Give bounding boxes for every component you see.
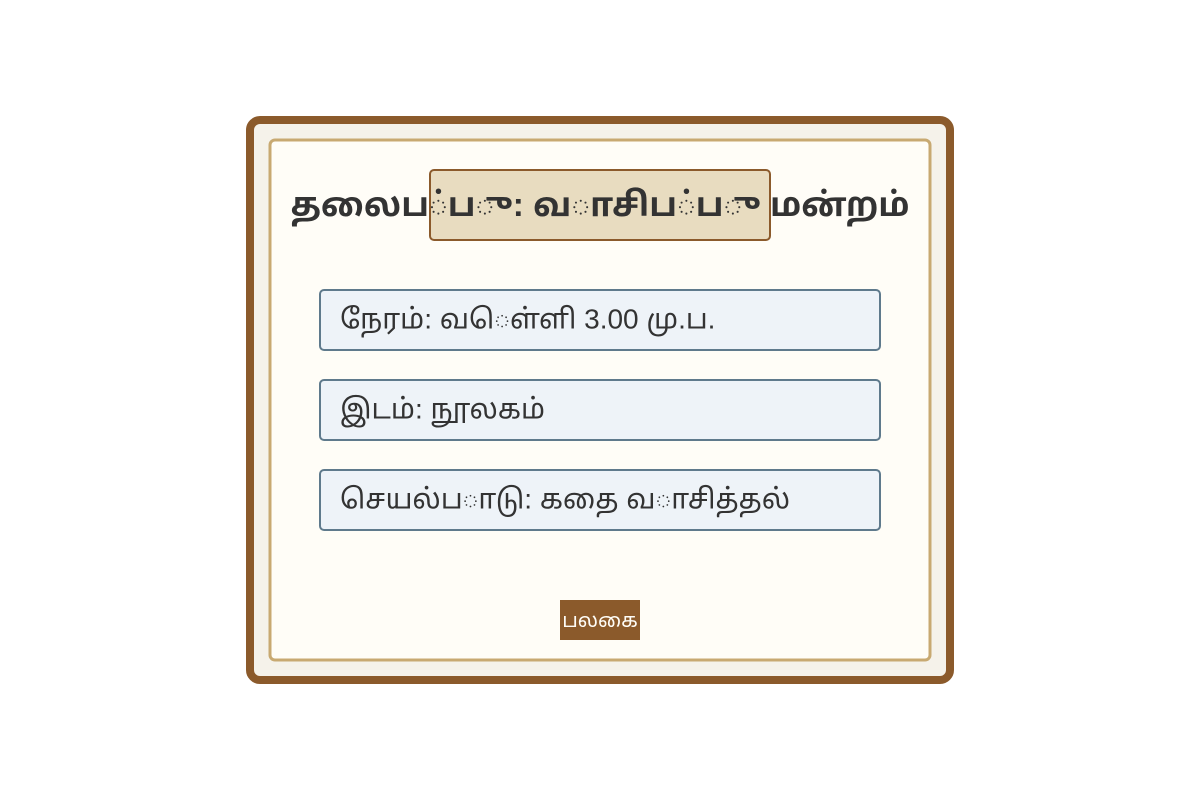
board label — [560, 600, 640, 640]
info row: activity — [320, 470, 880, 530]
title: தலைப்பு: வாசிப்பு மன்றம் — [290, 187, 910, 229]
board label: பலகை — [562, 610, 638, 632]
info row: activity: செயல்பாடு: கதை வாசித்தல் — [340, 484, 790, 520]
info row: place — [320, 380, 880, 440]
info row: time: நேரம்: வெள்ளி 3.00 மு.ப. — [340, 304, 715, 340]
panel: notice board frame — [250, 120, 950, 680]
info row: place: இடம்: நூலகம் — [340, 394, 545, 428]
info row: time — [320, 290, 880, 350]
panel: notice board inner sheet — [270, 140, 930, 660]
heading highlight — [430, 170, 770, 240]
